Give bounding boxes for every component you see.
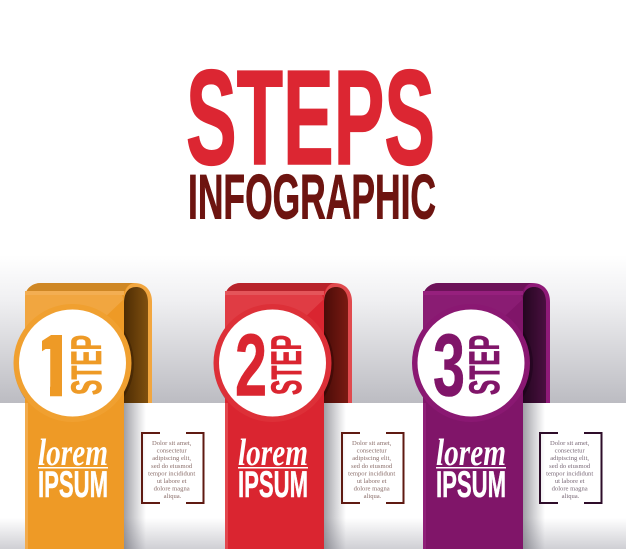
heading: infographic: INFOGRAPHIC: [188, 162, 436, 232]
label: step: STEP: [63, 335, 111, 395]
text block with brackets: Dolor sit amet,: [550, 440, 590, 447]
text block with brackets: ut labore et: [157, 478, 187, 485]
lorem ipsum label: [238, 432, 308, 505]
text block with brackets: ut labore et: [357, 478, 387, 485]
lorem ipsum label: [38, 432, 108, 505]
panel: step 2: [214, 283, 404, 549]
text block with brackets: ut labore et: [555, 478, 585, 485]
number 2: 2: [235, 316, 267, 414]
text block with brackets: aliqua.: [164, 493, 182, 500]
badge: [14, 304, 132, 422]
ribbon front: [225, 283, 334, 549]
lorem ipsum label: IPSUM: [38, 464, 108, 505]
ribbon shadow: [523, 403, 545, 549]
badge: [214, 304, 332, 422]
lorem ipsum label: IPSUM: [238, 464, 308, 505]
number 1: 1: [30, 316, 79, 415]
lorem ipsum label: [436, 432, 506, 505]
text block with brackets: consectetur: [357, 448, 387, 455]
ribbon shadow: [324, 403, 346, 549]
lorem ipsum label: lorem: [238, 432, 308, 474]
text block with brackets: aliqua.: [364, 493, 382, 500]
panel: step 1: [14, 283, 204, 549]
label: step: STEP: [461, 335, 509, 395]
text block with brackets: dolore magna: [154, 486, 190, 493]
text block with brackets: sed do eiusmod: [351, 463, 393, 470]
text block with brackets: Dolor sit amet,: [152, 440, 192, 447]
ribbon front: [25, 283, 134, 549]
lorem ipsum label: lorem: [436, 432, 506, 474]
text block with brackets: consectetur: [157, 448, 187, 455]
number 3: 3: [433, 316, 465, 414]
text block with brackets: dolore magna: [354, 486, 390, 493]
lorem ipsum label: IPSUM: [436, 464, 506, 505]
text block with brackets: dolore magna: [552, 486, 588, 493]
text block with brackets: adipiscing elit,: [550, 455, 589, 462]
text block with brackets: adipiscing elit,: [152, 455, 191, 462]
text block with brackets: Dolor sit amet,: [352, 440, 392, 447]
ribbon front: [423, 283, 532, 549]
text block with brackets: [540, 433, 602, 503]
text block with brackets: sed do eiusmod: [151, 463, 193, 470]
badge: [412, 304, 530, 422]
title: [186, 42, 436, 232]
label: step: STEP: [263, 335, 311, 395]
text block with brackets: adipiscing elit,: [352, 455, 391, 462]
text block with brackets: aliqua.: [562, 493, 580, 500]
text block with brackets: tempor incididunt: [148, 470, 195, 477]
panel: step 3: [412, 283, 602, 549]
ribbon back loop: [60, 283, 152, 403]
heading: steps: STEPS: [186, 42, 435, 193]
text block with brackets: tempor incididunt: [348, 470, 395, 477]
lorem ipsum label: lorem: [38, 432, 108, 474]
ribbon shadow: [124, 403, 146, 549]
text block with brackets: [142, 433, 204, 503]
ribbon back loop: [459, 283, 550, 403]
text block with brackets: tempor incididunt: [546, 470, 593, 477]
text block with brackets: [342, 433, 404, 503]
ribbon back loop: [260, 283, 352, 403]
text block with brackets: sed do eiusmod: [549, 463, 591, 470]
text block with brackets: consectetur: [555, 448, 585, 455]
